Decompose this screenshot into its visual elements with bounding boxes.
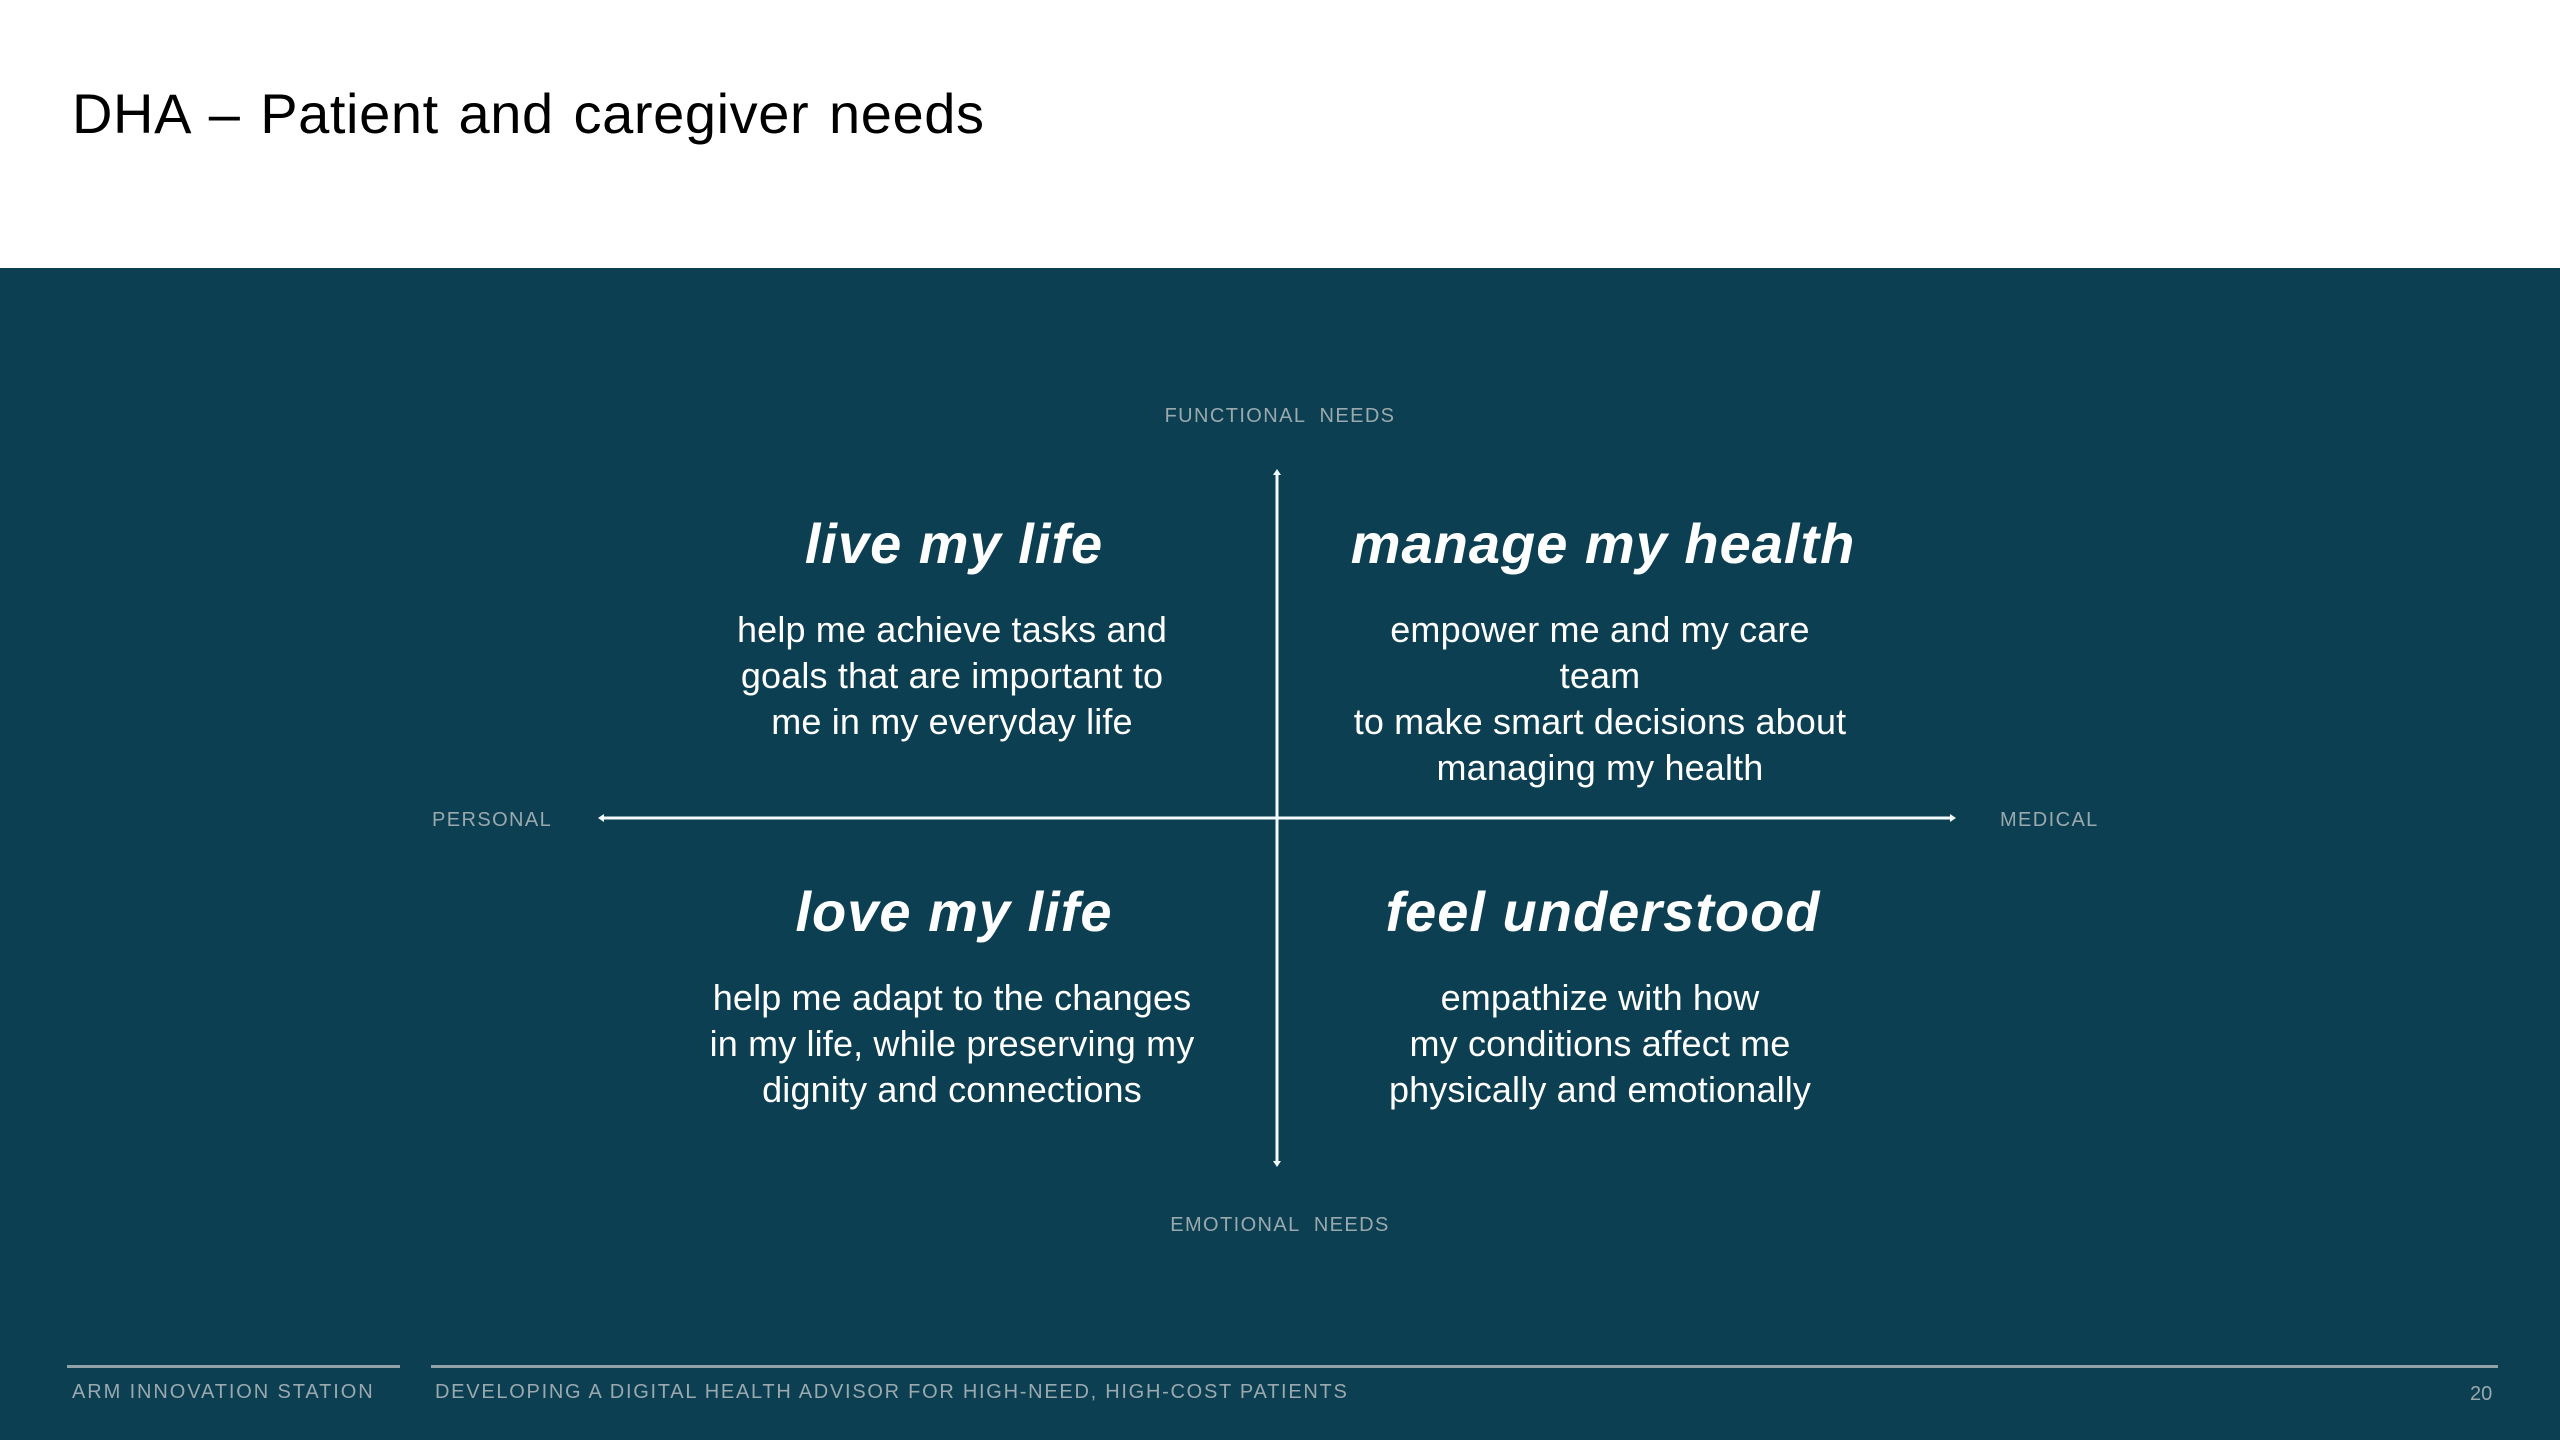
panel: manage my health	[1351, 512, 1855, 788]
footer rule right	[431, 1365, 2498, 1368]
heading: love my life: love my life	[795, 880, 1113, 943]
axis label: personal: PERSONAL	[432, 809, 552, 831]
footer rule left	[67, 1365, 400, 1368]
panel: live my life	[737, 512, 1167, 742]
text: feel understood description: empathize with how my conditions affect me physically and emotionally	[1389, 977, 1811, 1110]
axis label: functional needs: FUNCTIONAL NEEDS	[1165, 405, 1395, 427]
heading: live my life: live my life	[805, 512, 1103, 575]
heading: manage my health: manage my health	[1351, 512, 1855, 575]
axis label: emotional needs: EMOTIONAL NEEDS	[1170, 1214, 1390, 1236]
footer text: organization: ARM INNOVATION STATION	[72, 1381, 375, 1403]
axis label: medical: MEDICAL	[2000, 809, 2099, 831]
text: manage my health description: empower me and my care team to make smart decisions about managing my health	[1354, 609, 1846, 788]
heading: feel understood: feel understood	[1385, 880, 1821, 943]
panel: feel understood	[1385, 880, 1821, 1110]
footer text: project title: DEVELOPING A DIGITAL HEALTH ADVISOR FOR HIGH-NEED, HIGH-COST PATIENTS	[435, 1381, 1349, 1403]
text: love my life description: help me adapt to the changes in my life, while preserving my dignity and connections	[710, 977, 1194, 1110]
title: DHA – Patient and caregiver needs	[72, 82, 985, 145]
page number: 20	[2470, 1383, 2492, 1405]
panel: love my life	[710, 880, 1194, 1110]
text: live my life description: help me achieve tasks and goals that are important to me in my everyday life	[737, 609, 1167, 742]
